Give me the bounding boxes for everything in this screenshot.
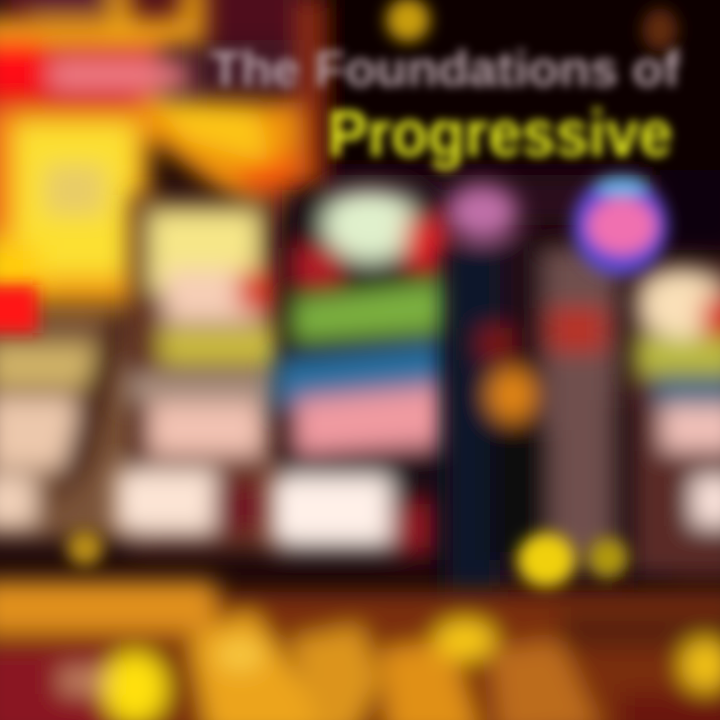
left lower machine: [0, 300, 140, 540]
far right machine: [630, 262, 720, 577]
top right glow: [642, 8, 678, 52]
red square left: [0, 285, 38, 333]
center machine: [270, 189, 454, 560]
upper scene backdrop: [0, 0, 720, 250]
top left crown, banner and yellow machine: [0, 0, 306, 305]
dark column and middle right machine: [445, 184, 672, 600]
title: [210, 41, 680, 170]
gold coins on tray: [67, 530, 628, 587]
second machine: [115, 195, 285, 550]
top coin light: [386, 0, 430, 42]
heading line two: Progressive: [328, 96, 672, 170]
heading line one: The Foundations of: [210, 41, 680, 97]
bottom gold coins: [0, 580, 720, 720]
icon: glowing globe: [572, 176, 668, 276]
